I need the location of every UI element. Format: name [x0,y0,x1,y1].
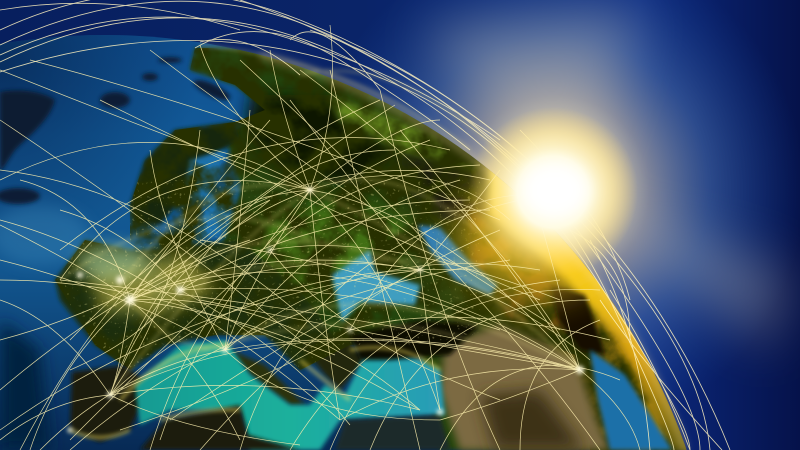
Greenland and Iceland [0,90,55,172]
sun glare on land [460,175,610,295]
amber steppe [470,210,570,330]
network hub lights [68,187,584,432]
globe [0,35,686,450]
Balkans and Greece [312,342,364,391]
Italy [230,350,305,405]
dark north-western ocean [0,35,168,222]
land mottling [55,48,686,450]
ocean [0,35,594,450]
Europe city glow [90,255,215,315]
golden sunlit limb [490,150,695,450]
Western and central Europe [55,240,340,370]
coastal glow [70,345,440,438]
Turkey [350,320,480,360]
network glow lines [60,45,580,395]
dark northern interior [245,95,400,190]
Iberia [70,365,150,442]
landmass: northern Russia and eastern Europe [190,48,690,450]
Middle East dark centre [480,390,585,450]
bright green plains [250,200,410,295]
Britain glow [76,244,148,280]
small dark islands [0,57,233,204]
network arcs: hub lines across Europe [0,25,640,450]
Persian Gulf / Arabian Sea [590,350,672,450]
bright green north coast [330,95,480,170]
sun [468,107,638,277]
Arabia and Middle East [440,325,610,450]
city lights [57,180,480,368]
Caspian Sea [418,225,498,295]
hazy pale ocean near Britain [0,205,90,265]
sun glow [468,107,638,277]
sun core [521,162,589,218]
atmosphere rim glow [260,55,685,450]
North Africa right [335,415,450,450]
North Africa left [140,405,300,450]
dark western ocean [0,320,50,450]
dark Urals region [400,150,490,220]
Mediterranean sea [135,340,445,450]
light rays [420,10,790,350]
dark mountains near rim [550,285,605,355]
Black Sea [332,250,420,322]
Baltic sea [185,150,240,240]
Scandinavia [130,122,240,225]
